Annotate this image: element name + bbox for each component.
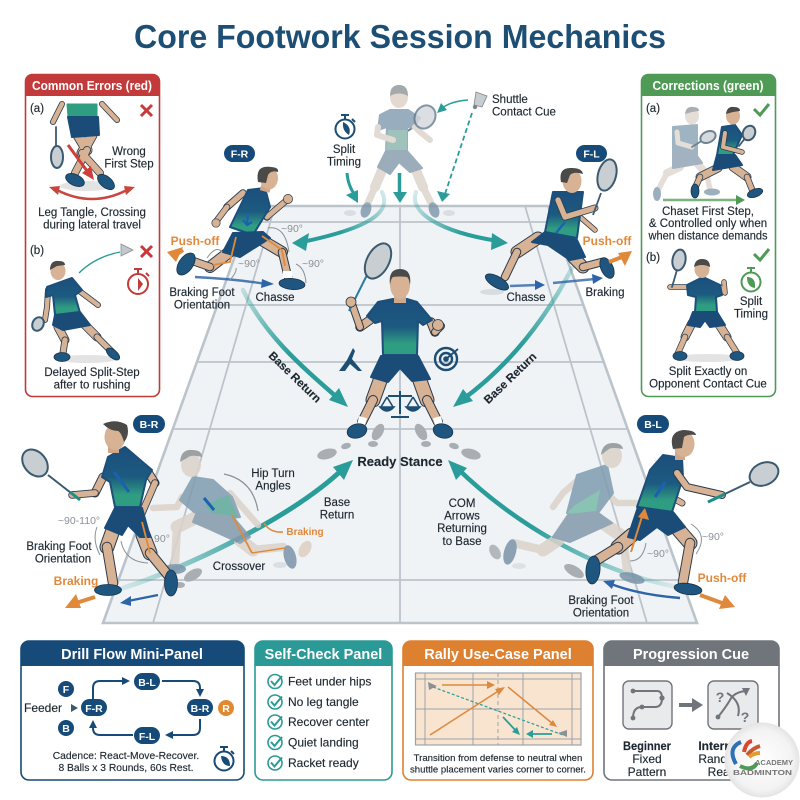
text: leg tangle: Leg Tangle, Crossing <box>38 207 146 219</box>
text: ready stance: Ready Stance <box>357 454 443 469</box>
text: intermediate: Random <box>698 752 744 766</box>
arrow: base return right <box>453 268 572 407</box>
circle badge: F: F <box>63 684 70 696</box>
arrow: shuttle to player <box>79 252 120 273</box>
panel: self-check <box>255 641 392 780</box>
arc: 90 knee <box>121 541 148 563</box>
label: feeder: Feeder <box>24 701 62 715</box>
text: base return right: Base Return <box>482 351 539 407</box>
logo swirl <box>732 741 760 768</box>
text: braking right: Braking <box>586 287 624 299</box>
text: braking small: Braking <box>286 527 324 538</box>
label: ~90° back-left front: ~90° <box>702 531 724 543</box>
text: com arrows: Returning <box>437 523 487 535</box>
heading: common errors: Common Errors (red) <box>32 79 152 93</box>
label: 90°: 90° <box>154 533 170 545</box>
text: braking left: Braking <box>54 574 98 588</box>
badge: B-R <box>133 415 165 433</box>
text: hip turn angles: Hip Turn <box>251 468 295 480</box>
arrow: base return left <box>243 290 348 407</box>
text: braking foot orientation top left: Orientation <box>174 300 230 312</box>
text: chaset first step: when distance demands <box>648 230 768 242</box>
text: com arrows: COM <box>449 498 475 510</box>
arrow: chase direction <box>663 195 745 205</box>
label (a): (a) <box>30 103 44 115</box>
text: intermediate: Read <box>708 765 736 779</box>
icon: red cross a <box>141 105 152 116</box>
figure: delayed split-step <box>30 261 122 363</box>
arc: braking foot angle <box>95 527 100 555</box>
icon: red cross b <box>141 246 152 257</box>
text: wrong first step: Wrong <box>112 146 146 158</box>
figure: ghost back-left <box>487 443 646 586</box>
footprints: ready stance <box>316 422 482 461</box>
item: feet under hips: Feet under hips <box>288 674 371 688</box>
node: F-R <box>81 699 107 716</box>
icon: random pattern: ? <box>741 709 749 725</box>
item: no leg tangle: No leg tangle <box>288 695 359 709</box>
label (b): (b) <box>646 252 660 264</box>
badge: F-R <box>224 145 255 162</box>
arrow: progression <box>679 698 703 712</box>
figure: wrong first step <box>49 104 135 199</box>
figure: F-L lunge player <box>480 157 620 295</box>
text: push-off right: Push-off <box>583 234 632 248</box>
node: F-R: F-R <box>85 703 103 715</box>
text: braking foot orientation back-left: Braking Foot <box>568 595 634 607</box>
arrow: braking small <box>264 523 283 532</box>
icon: balance scale <box>380 391 420 417</box>
arrow: return from back right <box>123 460 353 588</box>
item: recover center: Recover center <box>288 715 369 729</box>
text: split exactly: Split Exactly on <box>669 366 747 378</box>
badge: B-R: B-R <box>140 419 159 431</box>
text: cadence: 8 Balls x 3 Rounds, 60s Rest. <box>58 763 194 774</box>
item: quiet landing: Quiet landing <box>288 736 359 750</box>
badge: F-R: F-R <box>231 148 249 160</box>
node: F-L <box>134 727 160 744</box>
label: ~90° back-left knee: ~90° <box>647 548 669 560</box>
flow arrows <box>89 677 204 739</box>
figure: F-R lunge player <box>173 166 305 291</box>
text: chasse left: Chasse <box>256 292 294 304</box>
figure: B-L player <box>585 430 782 596</box>
circle badge: R: R <box>222 703 230 715</box>
panel: drill flow <box>21 641 244 780</box>
node: B-R: B-R <box>191 703 210 715</box>
arrow: blue back-right <box>120 595 158 606</box>
label: ~90° knee: ~90° <box>238 258 260 270</box>
arrow: push-off back-left <box>700 595 735 609</box>
text: com arrows: to Base <box>442 536 482 548</box>
heading: self-check: Self-Check Panel <box>265 647 382 663</box>
icon: random pattern: ? <box>716 689 724 705</box>
text: intermediate: Intermediate <box>698 739 770 753</box>
arrow: hip turn arc <box>224 474 258 511</box>
figure: centre ready stance player <box>346 239 454 440</box>
text: shuttle contact cue: Shuttle <box>492 94 528 106</box>
badge: F-L <box>576 145 607 162</box>
watermark: academy badge <box>724 722 800 798</box>
header: drill flow <box>21 641 244 666</box>
text: split timing: Split <box>740 296 763 308</box>
icon: stopwatch drill <box>214 747 234 770</box>
text: hip turn angles: Angles <box>255 481 291 493</box>
icon: red stopwatch <box>128 269 149 294</box>
icon: fixed pattern <box>623 681 672 729</box>
circle badge: R <box>218 700 234 716</box>
icon: target <box>435 348 458 370</box>
text: split timing: Timing <box>327 157 361 169</box>
figure: ghost back-right crossover <box>153 450 299 574</box>
arrow: braking right <box>553 274 603 284</box>
heading: drill flow: Drill Flow Mini-Panel <box>61 647 203 663</box>
panel: common errors <box>25 74 160 396</box>
text: wrong first step: First Step <box>104 158 154 170</box>
circle badge: F <box>58 681 74 697</box>
arrow: front right lunge path <box>292 192 384 251</box>
footprint marks back-left <box>562 561 586 581</box>
pointer <box>71 704 78 712</box>
icon: green check b <box>754 249 769 260</box>
arrow: blue back-left <box>603 580 680 598</box>
arrow: push-off left <box>167 247 183 262</box>
arrow: split timing drop <box>346 173 358 203</box>
text: base return lower: Return <box>320 510 354 522</box>
panel: progression cue <box>604 641 779 780</box>
header: progression <box>604 641 779 666</box>
arrow: chasse right <box>510 280 545 290</box>
node: F-L: F-L <box>139 731 156 743</box>
heading: corrections: Corrections (green) <box>652 79 764 93</box>
text: rally description: Transition from defense to neutral when <box>414 753 582 764</box>
label (b): (b) <box>30 245 44 257</box>
icon: shuttle b <box>121 244 133 256</box>
item: racket ready: Racket ready <box>288 756 359 770</box>
court <box>103 206 697 623</box>
text: beginner: Fixed <box>632 752 662 766</box>
text: chaset first step: & Controlled only when <box>649 218 767 230</box>
text: base return lower: Base <box>324 497 350 509</box>
text: braking foot orientation left: Orientation <box>35 554 91 566</box>
icon: agility runner <box>339 348 362 371</box>
text: push-off left: Push-off <box>171 234 220 248</box>
icon: green check a <box>754 104 769 115</box>
title: Core Footwork Session Mechanics <box>134 18 666 55</box>
label (a): (a) <box>646 103 660 115</box>
text: com arrows: Arrows <box>444 511 480 523</box>
heading: progression: Progression Cue <box>633 647 749 663</box>
label: ~90° foot: ~90° <box>302 258 324 270</box>
badge: B-L <box>637 415 669 433</box>
arcs: back-left angles <box>630 524 701 561</box>
arrow: shuttle to player top <box>437 100 468 113</box>
panel: rally use-case <box>403 641 593 780</box>
text: split exactly: Opponent Contact Cue <box>649 378 767 390</box>
text: split timing: Split <box>333 144 356 156</box>
figure: B-R player <box>17 421 177 596</box>
icon: green stopwatch <box>742 268 760 292</box>
header: self-check <box>255 641 392 666</box>
text: braking foot orientation back-left: Orientation <box>573 608 629 620</box>
arrow: return from back left <box>448 460 677 587</box>
figure: correct chassé <box>691 107 764 199</box>
heading: rally use-case: Rally Use-Case Panel <box>424 647 572 663</box>
node: B-L: B-L <box>138 677 156 689</box>
badge: F-L: F-L <box>583 148 600 160</box>
node: B-L <box>134 673 160 690</box>
badge: B-L: B-L <box>644 419 662 431</box>
text: beginner: Beginner <box>623 739 671 753</box>
arrow: front left lunge path <box>415 192 508 250</box>
header: corrections <box>641 74 776 96</box>
figure: split on cue <box>670 249 744 362</box>
text: shuttle contact cue: Contact Cue <box>492 107 556 119</box>
arrow: shuttle contact dashed <box>437 113 472 202</box>
icon: shuttle top <box>473 92 487 109</box>
node: B-R <box>187 699 213 716</box>
text: split timing: Timing <box>734 308 768 320</box>
text: base return left: Base Return <box>266 350 323 406</box>
arrow: push-off right <box>609 251 632 266</box>
circle badge: B <box>58 720 74 736</box>
angle marks F-R <box>207 228 306 283</box>
text: delayed split-step: after to rushing <box>54 380 130 392</box>
label: ~90-110°: ~90-110° <box>58 515 100 527</box>
text: cadence: Cadence: React-Move-Recover. <box>53 751 199 762</box>
icon: random pattern <box>708 681 758 729</box>
COM arrows on ghost <box>204 498 285 553</box>
figure: ghost chassé <box>653 107 720 201</box>
figure: split-step ghost player <box>344 85 455 219</box>
text: braking foot orientation top left: Braking Foot <box>169 287 235 299</box>
label: ~90° upper: ~90° <box>281 223 303 235</box>
header: common errors <box>25 74 160 96</box>
text: leg tangle: during lateral travel <box>43 220 141 232</box>
mini court chart <box>415 673 581 745</box>
arrow: chasse left <box>195 277 274 288</box>
footprint marks back-right <box>175 538 314 588</box>
arrow: braking left <box>65 594 95 608</box>
logo wordmark: ACADEMY <box>755 760 793 767</box>
text: push-off back-left: Push-off <box>698 571 747 585</box>
arrow: centre drop <box>393 173 407 203</box>
text: crossover: Crossover <box>213 561 265 573</box>
icon: stopwatch top <box>336 115 355 138</box>
header: rally use-case <box>403 641 593 666</box>
logo wordmark: BADMINTON <box>733 770 792 777</box>
text: delayed split-step: Delayed Split-Step <box>44 367 140 379</box>
panel: corrections <box>641 74 776 396</box>
text: chasse right: Chasse <box>506 292 546 304</box>
text: rally description: shuttle placement varies corner to corner. <box>410 764 586 776</box>
text: chaset first step: Chaset First Step, <box>662 206 754 218</box>
circle badge: B: B <box>62 723 70 735</box>
text: beginner: Pattern <box>628 765 666 779</box>
text: braking foot orientation left: Braking Foot <box>26 541 92 553</box>
